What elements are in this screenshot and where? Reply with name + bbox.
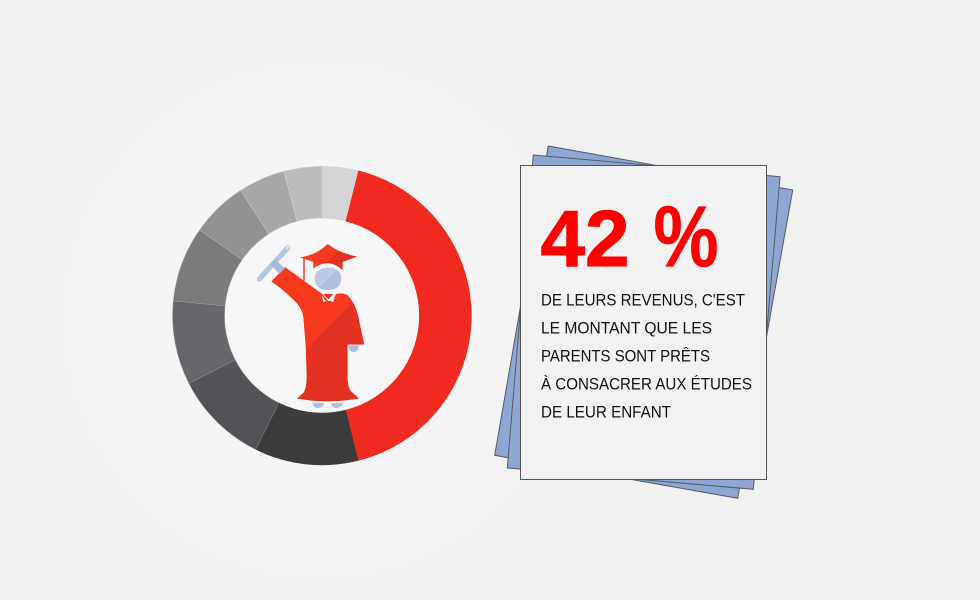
icon: diploma scroll <box>259 246 289 279</box>
segment: darkest grey <box>256 403 358 465</box>
icon: gown <box>272 267 364 401</box>
segment: pale grey <box>284 166 322 221</box>
front paper <box>520 166 766 480</box>
icon: mortarboard cap <box>300 244 357 281</box>
segment: mid grey <box>173 230 242 306</box>
big number: % <box>654 189 718 285</box>
segment: red 42 percent <box>346 171 471 460</box>
middle blue sheet <box>507 155 780 489</box>
segment: medium grey <box>200 190 269 260</box>
donut chart: 42 percent <box>173 166 471 465</box>
segment: charcoal grey <box>173 301 235 383</box>
text block: description: DE LEURS REVENUS, C'EST <box>541 292 745 310</box>
papers stack <box>495 146 793 498</box>
segment: lightest grey <box>322 166 359 221</box>
text block: description: À CONSACRER AUX ÉTUDES <box>541 375 752 394</box>
text block: description <box>541 292 752 422</box>
text block: description: LE MONTANT QUE LES <box>541 320 712 338</box>
icon: face <box>314 267 342 291</box>
icon: feet <box>312 403 343 408</box>
segment: dark grey <box>189 360 279 449</box>
back blue sheet <box>495 146 793 498</box>
icon: collar <box>322 294 335 302</box>
inner disc <box>224 218 420 414</box>
segment: light grey <box>241 171 297 234</box>
text block: description: DE LEUR ENFANT <box>541 404 671 422</box>
icon: hand <box>349 345 359 352</box>
text block: description: PARENTS SONT PRÊTS <box>541 347 710 366</box>
icon: graduate <box>259 244 364 408</box>
big number: 42 <box>540 194 629 283</box>
big number <box>540 189 718 285</box>
